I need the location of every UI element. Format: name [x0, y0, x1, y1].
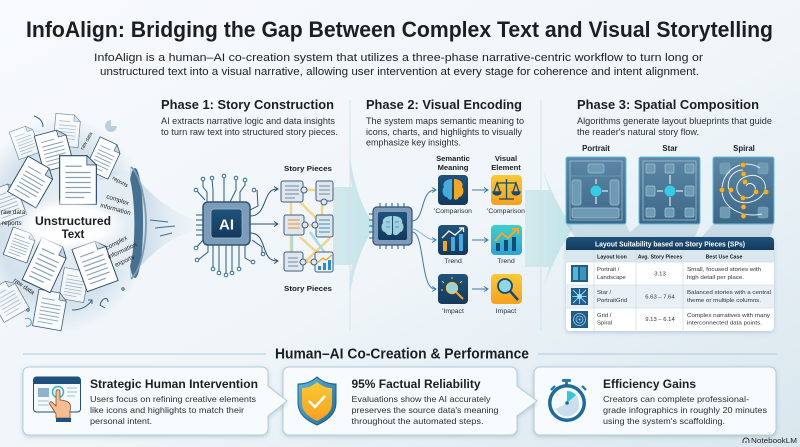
icon: story pieces	[281, 181, 333, 272]
label: portrait: Portrait	[582, 144, 610, 153]
text: intervention description: Users focus on refining creative elements	[90, 394, 256, 404]
center glow	[12, 198, 128, 252]
layout: spiral	[713, 144, 774, 224]
text: efficiency description: grade infographics in roughly 20 minutes	[603, 405, 767, 415]
row: portrait: high detail per place.	[687, 275, 744, 281]
text: reliability description: Evaluations show the AI accurately	[352, 394, 491, 404]
icon: trend bars	[438, 225, 468, 255]
layout: portrait	[566, 144, 626, 224]
column heading: visual element: Visual	[495, 154, 517, 163]
text: intervention description	[90, 394, 256, 426]
row: star: theme or multiple columns.	[687, 298, 761, 304]
row: portrait: Landscape	[597, 275, 627, 281]
row: star: Balanced stories with a central	[687, 290, 771, 296]
scattered words: information	[107, 241, 139, 261]
phase 1 description	[161, 116, 338, 137]
row: star	[571, 288, 771, 305]
heading: unstructured text: Unstructured	[35, 216, 111, 228]
row: star: PortraitGrid	[597, 298, 627, 304]
column headers: Layout Icon	[597, 254, 627, 260]
phase 1 description: to turn raw text into structured story pieces.	[161, 127, 338, 137]
section heading: human-ai co-creation: Human–AI Co-Creation & Performance	[275, 346, 529, 362]
phase 2 description: icons, charts, and highlights to visually	[366, 127, 523, 137]
label: spiral: Spiral	[733, 144, 755, 153]
row: star: Star /	[597, 290, 611, 296]
icon: portrait layout	[571, 265, 588, 282]
panel: unstructured text	[0, 113, 204, 333]
heading: unstructured text: Text	[62, 229, 85, 241]
heading: factual reliability: 95% Factual Reliability	[352, 379, 481, 391]
column heading: semantic meaning	[436, 154, 470, 172]
row: spiral	[571, 311, 770, 328]
card: efficiency gains	[534, 367, 776, 435]
label: impact visual: Impact	[496, 308, 516, 315]
row: spiral: Complex narratives with many	[687, 313, 770, 319]
title: InfoAlign: Bridging the Gap Between Complex Text and Visual Storytelling	[26, 17, 773, 42]
phase 2 description: The system maps semantic meaning to	[366, 116, 524, 126]
arrows from brain chip	[412, 188, 488, 292]
icon: trend chart	[491, 225, 522, 255]
phase 3 description: Algorithms generate layout blueprints that guide	[577, 116, 772, 126]
heading: phase 1: Phase 1: Story Construction	[161, 97, 334, 112]
scattered words: complex	[105, 234, 129, 252]
card: factual reliability	[283, 367, 537, 435]
label: trend: Trend	[444, 258, 462, 265]
text: intervention description: personal intent.	[90, 416, 152, 426]
icon: magnifier	[491, 274, 522, 304]
row: spiral: Grid /	[597, 313, 612, 319]
icon: shield	[298, 377, 336, 425]
text: intervention description: like icons and highlights to match their	[90, 405, 244, 415]
scattered words: reports	[111, 176, 129, 189]
documents	[0, 113, 123, 331]
scattered words: exports	[114, 254, 136, 269]
phase 2 description	[366, 116, 524, 148]
phase 3 description	[577, 116, 772, 137]
column headers: Avg. Story Pieces	[638, 254, 682, 260]
icon: AI chip: AI	[219, 216, 234, 234]
watermark: NotebookLM: NotebookLM	[751, 436, 797, 445]
row: portrait: Portrait /	[597, 267, 620, 273]
icon: spiral layout	[571, 311, 588, 328]
icon: star layout	[571, 288, 588, 305]
icon: stopwatch	[548, 379, 586, 422]
icon: pie chart	[105, 120, 117, 132]
scattered words: information	[99, 202, 132, 217]
column heading: semantic meaning: Meaning	[438, 163, 469, 172]
intro text: InfoAlign is a human–AI co-creation system that utilizes a three-phase narrative-centric workflow to turn long or	[94, 52, 704, 64]
icon: funnel	[70, 167, 204, 279]
icon: scales	[491, 175, 522, 205]
table title bar: Layout Suitability based on Story Pieces (SPs)	[595, 240, 746, 248]
column heading: semantic meaning: Semantic	[436, 154, 470, 163]
icon: spotlight magnifier	[438, 274, 468, 304]
heading: phase 2: Phase 2: Visual Encoding	[366, 97, 522, 112]
phase 2 description: emphasize key insights.	[366, 138, 461, 148]
arrows to story pieces	[250, 186, 278, 264]
text: efficiency description: using the system's scaffolding.	[603, 416, 725, 426]
table: layout suitability	[566, 237, 774, 331]
column heading: visual element	[491, 154, 521, 172]
card: strategic human intervention	[23, 367, 287, 435]
text: reliability description: throughout the automated steps.	[352, 416, 484, 426]
text: reliability description	[352, 394, 499, 426]
column heading: visual element: Element	[491, 163, 521, 172]
flow arrows background	[333, 100, 573, 330]
scattered words: complex	[105, 193, 131, 207]
text: efficiency description: Creators can complete professional-	[603, 394, 749, 404]
label: trend visual: Trend	[497, 258, 515, 265]
row: portrait	[571, 265, 761, 282]
heading: phase 3: Phase 3: Spatial Composition	[577, 97, 759, 112]
row: comparison	[434, 175, 525, 215]
layout: star	[639, 144, 700, 224]
phase 3 description: the reader's natural story flow.	[577, 127, 699, 137]
panel: phase 1	[161, 97, 338, 293]
label: story pieces top: Story Pieces	[284, 164, 332, 173]
heading: unstructured text	[35, 216, 111, 241]
icon: brain	[438, 175, 468, 205]
label: comparison visual: 'Comparison	[487, 208, 525, 215]
icon: AI chip	[194, 174, 265, 277]
scattered words: raw data	[80, 131, 94, 151]
column headers	[597, 254, 742, 260]
row: impact	[438, 274, 522, 315]
label: story pieces bottom: Story Pieces	[284, 284, 332, 293]
row: portrait: Small, focused stories with	[687, 267, 761, 273]
story pieces connector lines	[291, 190, 330, 262]
label: impact: 'Impact	[442, 308, 464, 315]
text: efficiency description	[603, 394, 767, 426]
scattered words: raw data	[1, 209, 26, 216]
row: portrait: 3.13	[654, 272, 666, 278]
label: star: Star	[662, 144, 678, 153]
table title bar	[566, 237, 774, 250]
text: reliability description: preserves the source data's meaning	[352, 405, 499, 415]
row: star: 6.63 – 7.64	[645, 294, 675, 300]
small accents	[25, 116, 124, 326]
heading: efficiency gains: Efficiency Gains	[603, 379, 696, 391]
row: spiral: Spiral	[597, 320, 612, 326]
intro text: unstructured text into a visual narrative, allowing user intervention at every stage for coherence and intent alignment.	[100, 66, 699, 78]
row: spiral: interconnected data points.	[687, 320, 762, 326]
label: comparison: 'Comparison	[434, 208, 472, 215]
row: spiral: 9.13 – 6.14	[645, 317, 675, 323]
scattered words: reports	[2, 220, 22, 227]
light beams to table	[566, 224, 774, 237]
scattered words: raw data	[12, 277, 36, 297]
row: trend	[438, 225, 522, 265]
icon: brain chip	[369, 203, 412, 249]
scattered words	[1, 131, 139, 297]
panel: phase 3	[566, 97, 774, 331]
intro text	[94, 52, 704, 78]
column headers: Best Use Case	[706, 254, 742, 260]
paper swirl	[0, 117, 150, 333]
panel: phase 2	[366, 97, 525, 315]
heading: strategic human intervention: Strategic Human Intervention	[90, 379, 258, 391]
icon: browser with hand	[34, 377, 80, 422]
phase 1 description: AI extracts narrative logic and data insights	[161, 116, 336, 126]
